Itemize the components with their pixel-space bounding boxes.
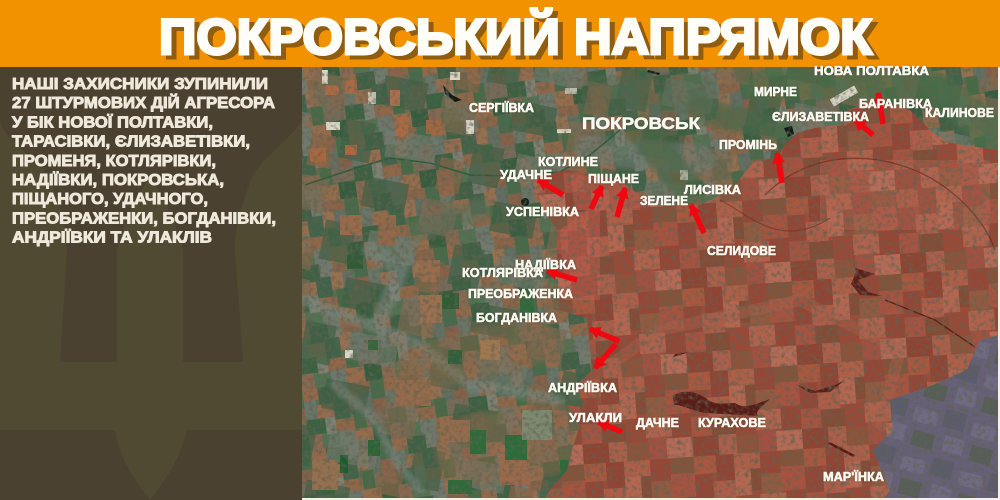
text block: summary: ПРОМЕНЯ, КОТЛЯРІВКИ,	[12, 153, 216, 170]
map labels: settlements: СЕЛИДОВЕ	[707, 244, 776, 258]
map labels: settlements: УСПЕНІВКА	[506, 205, 579, 219]
arrows: attack directions	[538, 93, 883, 432]
map labels: settlements	[462, 64, 994, 484]
panel: satellite map	[302, 67, 1000, 500]
text block: summary: 27 ШТУРМОВИХ ДІЙ АГРЕСОРА	[12, 94, 275, 112]
heading banner	[0, 0, 1000, 67]
region: occupied territory red	[500, 100, 1000, 500]
texture overlay	[302, 67, 998, 498]
map labels: settlements: ПРЕОБРАЖЕНКА	[468, 287, 573, 301]
map labels: settlements: КУРАХОВЕ	[698, 416, 766, 430]
text block: summary: У БІК НОВОЇ ПОЛТАВКИ,	[12, 114, 213, 132]
water: Kurakhove reservoir	[673, 392, 770, 416]
icon: trident watermark	[0, 120, 302, 500]
map labels: settlements: НОВА ПОЛТАВКА	[814, 64, 929, 78]
map labels: settlements: НАДІЇВКА	[515, 257, 576, 272]
region: long-occupied territory purple	[873, 335, 1000, 500]
map labels: settlements: БОГДАНІВКА	[476, 311, 557, 325]
map labels: settlements: ЛИСІВКА	[684, 183, 741, 197]
terrain: hand-placed fields	[310, 80, 570, 494]
text block: summary: АНДРІЇВКИ ТА УЛАКЛІВ	[12, 230, 212, 246]
terrain: light fields	[322, 70, 858, 358]
map labels: settlements: КОТЛИНЕ	[538, 155, 598, 169]
text block: summary: НАШІ ЗАХИСНИКИ ЗУПИНИЛИ	[12, 76, 268, 93]
title: ПОКРОВСЬКИЙ НАПРЯМОК	[159, 8, 872, 65]
map labels: settlements: КОТЛЯРІВКА	[462, 266, 543, 280]
text block: summary: ПРЕОБРАЖЕНКИ, БОГДАНІВКИ,	[12, 210, 276, 228]
map labels: settlements: МАР'ЇНКА	[823, 469, 884, 484]
background panel	[0, 67, 302, 500]
map labels: settlements: ЄЛИЗАВЕТІВКА	[772, 110, 869, 124]
map labels: settlements: ПІЩАНЕ	[588, 172, 639, 186]
water bodies	[443, 70, 794, 206]
map labels: settlements: СЕРГІЇВКА	[469, 100, 534, 115]
map labels: settlements: ДАЧНЕ	[636, 416, 679, 430]
text block: summary: ПІЩАНОГО, УДАЧНОГО,	[12, 191, 208, 208]
map labels: settlements: ПОКРОВСЬК	[582, 114, 701, 133]
text block: summary: НАДІЇВКИ, ПОКРОВСЬКА,	[12, 172, 224, 189]
map labels: settlements: КАЛИНОВЕ	[925, 106, 994, 120]
map labels: settlements: МИРНЕ	[754, 85, 797, 99]
text block: summary: ТАРАСІВКИ, ЄЛИЗАВЕТІВКИ,	[12, 134, 250, 150]
map labels: settlements: ПРОМІНЬ	[719, 138, 777, 152]
map labels: settlements: БАРАНІВКА	[859, 97, 932, 111]
text block: summary	[12, 76, 276, 246]
map labels: settlements: ЗЕЛЕНЕ	[640, 194, 688, 208]
map labels: settlements: УЛАКЛИ	[569, 411, 622, 425]
terrain: grey built-up and river valleys	[305, 85, 995, 490]
map labels: settlements: АНДРІЇВКА	[548, 380, 617, 395]
map labels: settlements: УДАЧНЕ	[500, 168, 552, 182]
road	[305, 130, 620, 185]
